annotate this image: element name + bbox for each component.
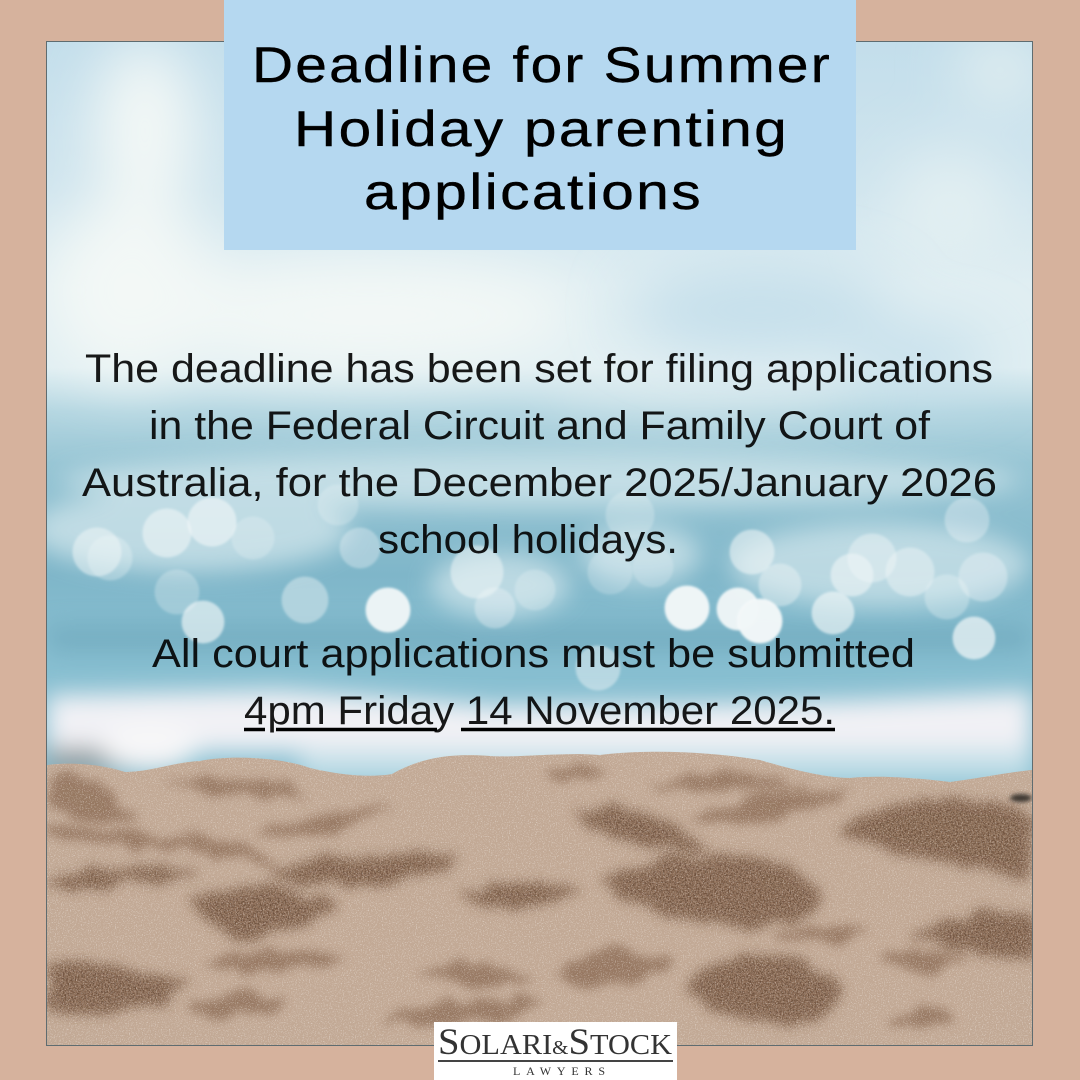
- pale band of shallow water: [47, 690, 1032, 780]
- body text: deadline announcement: Australia, for the December 2025/January 2026: [82, 461, 997, 505]
- body text: filing date: All court applications must be submitted: [152, 632, 915, 676]
- body text: filing date: [152, 632, 915, 733]
- bokeh lights: [30, 452, 1030, 690]
- title text: applications: [364, 164, 703, 220]
- body text: deadline announcement: The deadline has been set for filing applications: [85, 347, 993, 391]
- speckled dark grains: [47, 801, 1032, 1022]
- title panel: [224, 0, 856, 250]
- body text: deadline announcement: school holidays.: [378, 518, 678, 562]
- title text: [252, 37, 832, 220]
- soft dune shadows: [47, 765, 1032, 1026]
- body text: deadline announcement: [82, 347, 997, 562]
- sky and sea: [45, 40, 1040, 782]
- sand dunes: [47, 745, 1032, 1045]
- body text: deadline announcement: in the Federal Circuit and Family Court of: [149, 404, 931, 448]
- logo: Solari & Stock Lawyers: LAWYERS: [513, 1064, 605, 1078]
- body text: filing date: 4pm Friday 14 November 2025.: [244, 689, 835, 733]
- title text: Deadline for Summer: [252, 37, 832, 93]
- pebble: [1010, 794, 1032, 802]
- light sand grain: [47, 745, 1032, 1045]
- title text: Holiday parenting: [294, 101, 789, 157]
- logo: Solari & Stock Lawyers: [434, 1022, 677, 1080]
- logo: Solari & Stock Lawyers: SOLARI&STOCK: [438, 1022, 672, 1063]
